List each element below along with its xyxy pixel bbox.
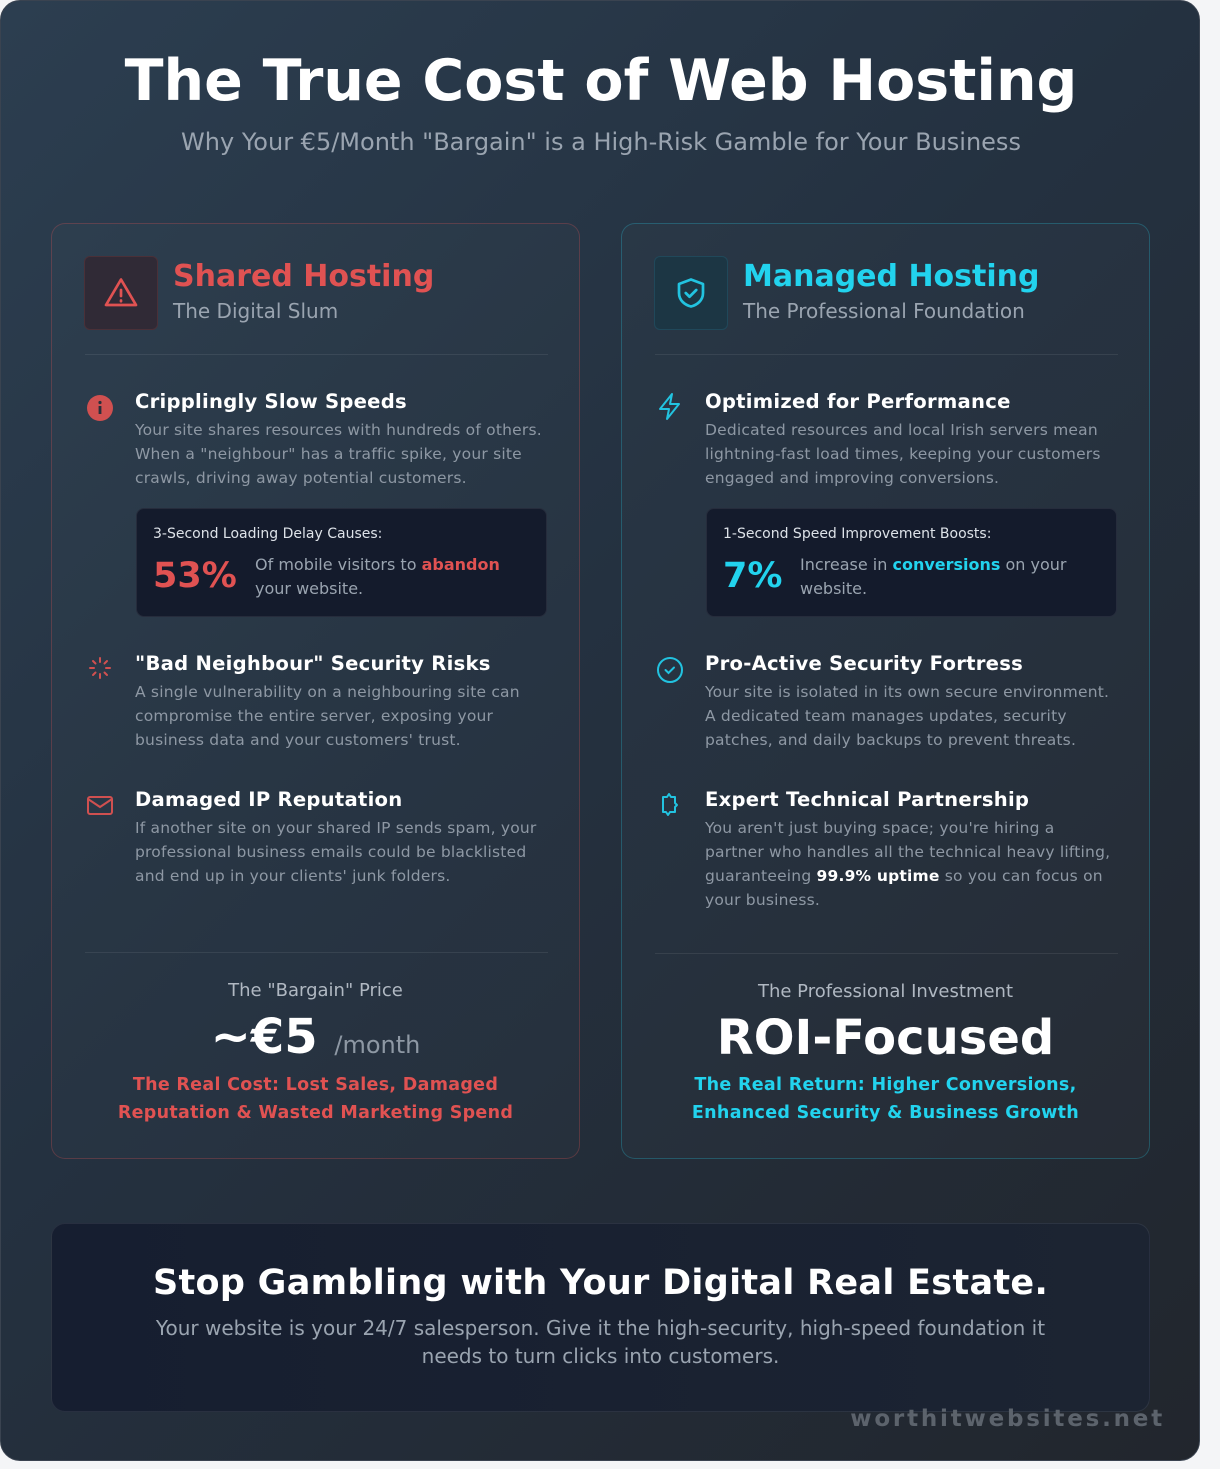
heading: shared hosting: Shared Hosting bbox=[173, 259, 434, 294]
footer: investment: The Real Return: Higher Conversions, bbox=[694, 1075, 1077, 1095]
icon: mail bbox=[87, 796, 113, 815]
item: security fortress: Your site is isolated in its own secure environment. A dedicated team manages updates, security patches, and daily backups to prevent threats. bbox=[705, 683, 1109, 749]
footer: bargain price: The Real Cost: Lost Sales, Damaged bbox=[133, 1075, 498, 1095]
stat box: 53%: 3-Second Loading Delay Causes: bbox=[153, 526, 382, 542]
subtitle: Why Your €5/Month "Bargain" is a High-Risk Gamble for Your Business bbox=[181, 128, 1021, 156]
heading: managed hosting: Managed Hosting bbox=[743, 259, 1039, 294]
item: ip reputation bbox=[87, 788, 537, 885]
item: ip reputation: Damaged IP Reputation bbox=[135, 788, 402, 811]
item: slow speeds: Cripplingly Slow Speeds bbox=[135, 390, 407, 413]
stat box: 7%: 7% bbox=[723, 556, 782, 596]
footer: bargain price: The "Bargain" Price bbox=[228, 980, 403, 1001]
icon: check circle bbox=[657, 657, 683, 683]
footer: investment: ROI-Focused bbox=[717, 1010, 1054, 1066]
footer: investment: The Professional Investment bbox=[758, 981, 1013, 1002]
icon: warning bbox=[84, 256, 158, 330]
item: partnership: Expert Technical Partnership bbox=[705, 788, 1029, 811]
title: The True Cost of Web Hosting bbox=[125, 48, 1077, 114]
watermark: worthitwebsites.net bbox=[850, 1406, 1165, 1432]
item: performance bbox=[659, 390, 1101, 487]
item: partnership bbox=[662, 788, 1110, 909]
item: performance: Dedicated resources and local Irish servers mean lightning-fast load times, keeping your customers engaged and improving conversions. bbox=[705, 421, 1101, 487]
icon: puzzle bbox=[662, 793, 678, 816]
footer: bargain price bbox=[118, 980, 513, 1123]
footer: investment: Enhanced Security & Business Growth bbox=[692, 1103, 1079, 1123]
stat box: 53%: 53% bbox=[153, 556, 237, 596]
footer: bargain price: ~€5 /month bbox=[211, 1009, 420, 1065]
item: performance: Optimized for Performance bbox=[705, 390, 1011, 413]
item: partnership: You aren't just buying space; you're hiring a partner who handles all the technical heavy lifting, guaranteeing 99.9% uptime so you can focus on your business. bbox=[705, 819, 1110, 909]
icon: shield bbox=[654, 256, 728, 330]
stat box: 7%: Increase in conversions on your website. bbox=[800, 555, 1066, 598]
icon: spinner bbox=[89, 657, 111, 679]
subheading: The Digital Slum bbox=[173, 299, 338, 323]
call to action bbox=[51, 1223, 1150, 1412]
panel: managed hosting bbox=[621, 223, 1150, 1159]
item: security fortress bbox=[657, 652, 1109, 749]
footer: investment bbox=[692, 981, 1079, 1123]
stat box: 7% bbox=[706, 508, 1117, 617]
stat box: 53% bbox=[136, 508, 547, 617]
footer: bargain price: Reputation & Wasted Marketing Spend bbox=[118, 1103, 513, 1123]
item: security risks bbox=[89, 652, 520, 749]
item: security fortress: Pro-Active Security Fortress bbox=[705, 652, 1023, 675]
icon: info bbox=[87, 395, 113, 421]
subheading: The Professional Foundation bbox=[743, 299, 1025, 323]
item: security risks: "Bad Neighbour" Security Risks bbox=[135, 652, 491, 675]
panel: shared hosting bbox=[51, 223, 580, 1159]
stat box: 7%: 1-Second Speed Improvement Boosts: bbox=[723, 526, 991, 542]
item: slow speeds: Your site shares resources with hundreds of others. When a "neighbour" has a traffic spike, your site crawls, driving away potential customers. bbox=[135, 421, 542, 487]
item: ip reputation: If another site on your shared IP sends spam, your professional business emails could be blacklisted and end up in your clients' junk folders. bbox=[135, 819, 537, 885]
item: security risks: A single vulnerability on a neighbouring site can compromise the entire server, exposing your business data and your customers' trust. bbox=[135, 683, 520, 749]
item: slow speeds bbox=[87, 390, 542, 487]
cta body: Your website is your 24/7 salesperson. Give it the high-security, high-speed foundation it needs to turn clicks into customers. bbox=[156, 1316, 1045, 1368]
cta heading: Stop Gambling with Your Digital Real Estate. bbox=[153, 1263, 1048, 1303]
stat box: 53%: Of mobile visitors to abandon your website. bbox=[255, 555, 500, 598]
icon: bolt bbox=[659, 393, 680, 420]
